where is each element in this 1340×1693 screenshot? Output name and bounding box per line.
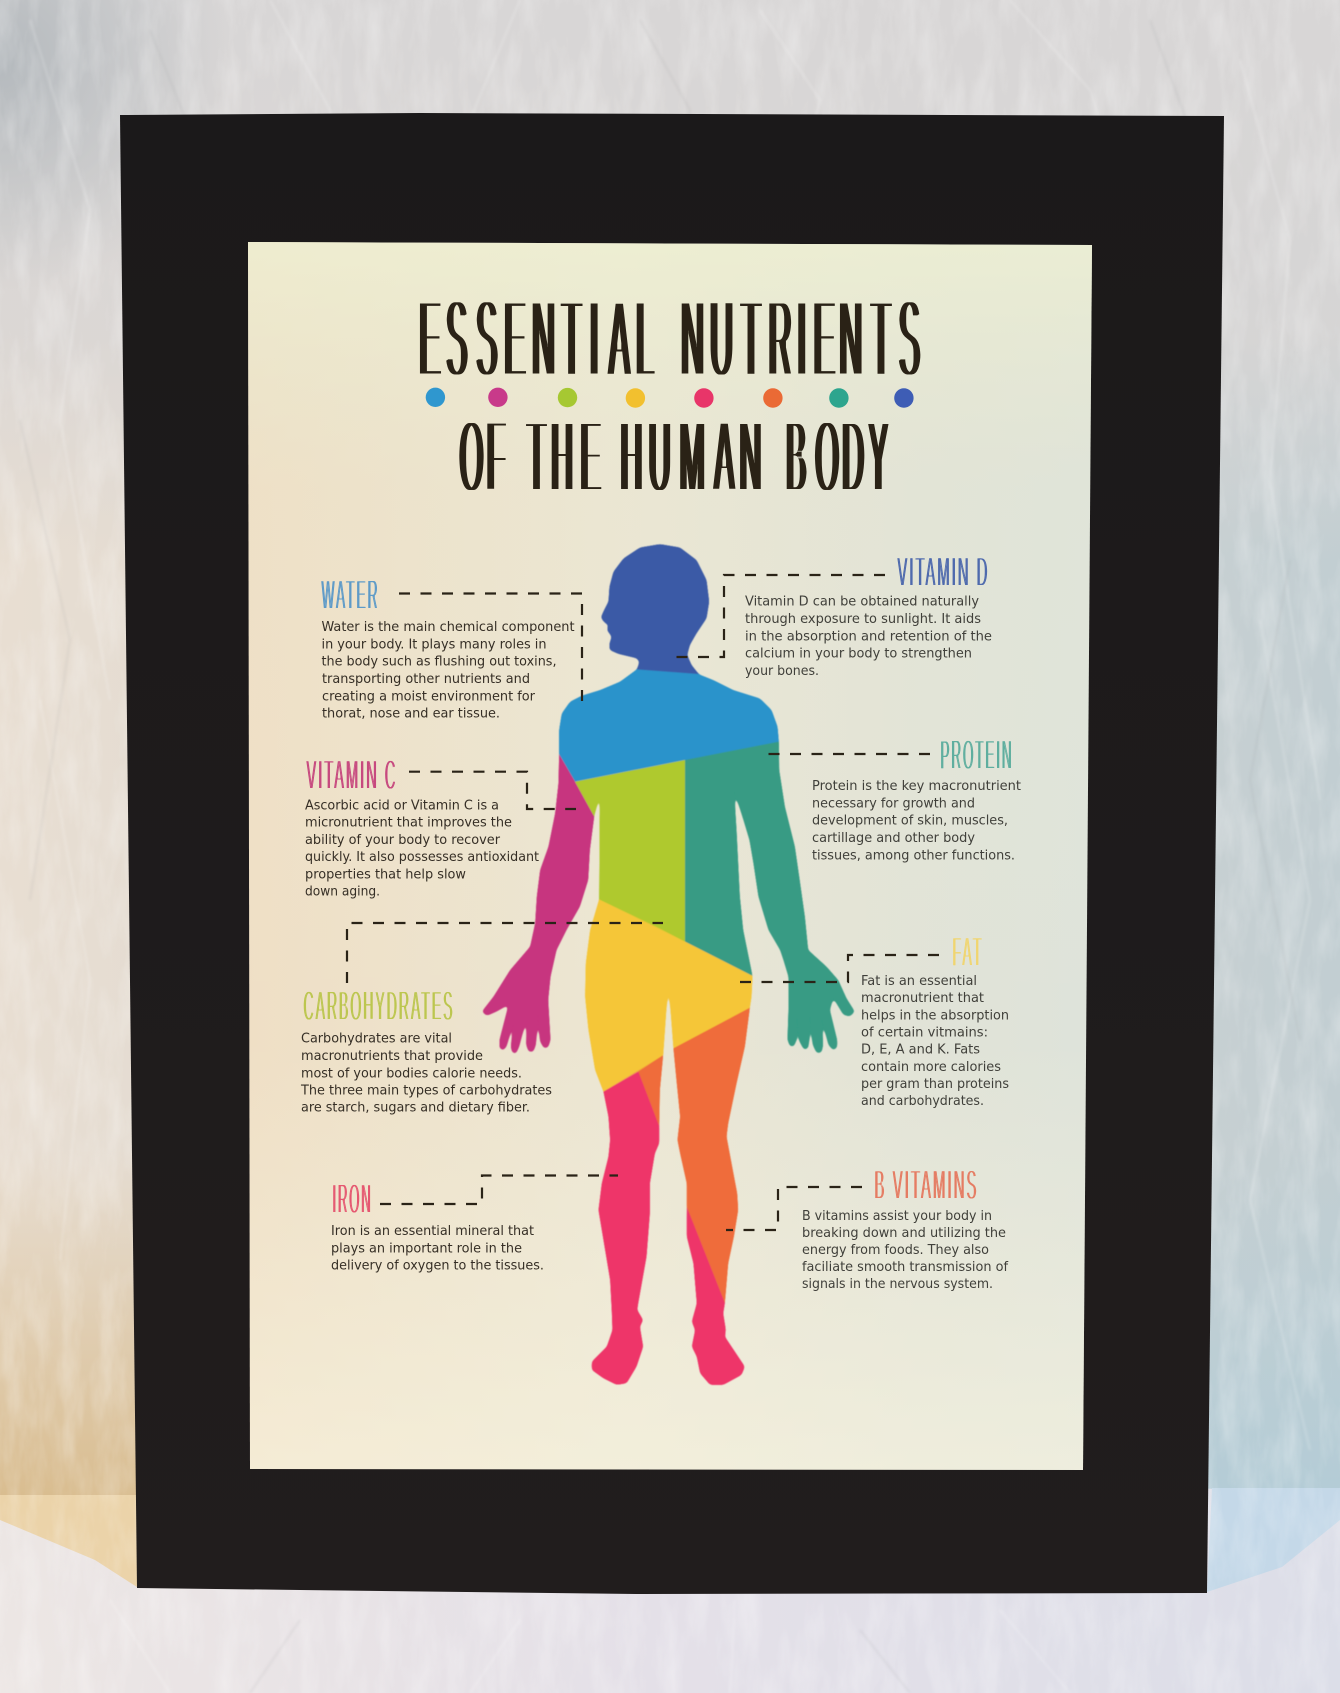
text: fat: helps in the absorption (861, 1008, 1009, 1023)
text: fat: Fat is an essential (861, 974, 977, 989)
text: water: the body such as flushing out toxins, (322, 655, 556, 670)
text: fat: per gram than proteins (861, 1077, 1009, 1092)
text: B vitamins: faciliate smooth transmission of (802, 1260, 1008, 1275)
panel: water (321, 571, 582, 722)
text: vitamin D: calcium in your body to strengthen (745, 647, 972, 662)
text: water: transporting other nutrients and (322, 672, 530, 687)
panel: vitamin C: VITAMIN C (306, 751, 397, 798)
text: vitamin D (745, 595, 992, 679)
body: shoulders, water (559, 669, 779, 782)
panel: water: WATER (321, 571, 379, 618)
body: right lower leg, iron (687, 1207, 745, 1385)
panel: vitamin C (305, 751, 576, 900)
text: water: Water is the main chemical component (322, 620, 574, 635)
body: torso left, carbohydrates colour green (575, 760, 685, 942)
text: vitamin D: through exposure to sunlight. It aids (745, 612, 981, 627)
connector: protein (767, 753, 930, 755)
text: B VITAMINS (874, 1161, 978, 1208)
text: vitamin D: Vitamin D can be obtained naturally (745, 595, 979, 610)
panel: protein (767, 731, 1021, 863)
text: carbohydrates: macronutrients that provide (301, 1049, 483, 1064)
text: fat: and carbohydrates. (861, 1094, 984, 1109)
panel: fat: FAT (952, 928, 983, 975)
panel: carbohydrates: CARBOHYDRATES (303, 982, 454, 1029)
row of coloured dots (426, 388, 914, 408)
text: protein: Protein is the key macronutrient (812, 779, 1021, 794)
text: carbohydrates: are starch, sugars and dietary fiber. (301, 1101, 530, 1116)
text: carbohydrates: The three main types of carbohydrates (300, 1084, 552, 1098)
body: hips, fat (585, 899, 753, 1092)
text: carbohydrates (300, 1032, 552, 1116)
human body figure (482, 544, 855, 1385)
panel: carbohydrates (300, 923, 663, 1116)
text: vitamin C (305, 798, 539, 900)
body: left leg, iron (592, 1072, 659, 1385)
panel: iron (331, 1175, 618, 1274)
text: fat: of certain vitmains: (861, 1026, 988, 1040)
text: vitamin C: micronutrient that improves the (305, 816, 512, 831)
text: fat (861, 974, 1009, 1109)
connector: carbohydrates (347, 923, 663, 983)
text: VITAMIN D (897, 548, 989, 595)
text: water: in your body. It plays many roles in (322, 637, 546, 652)
text: B vitamins: breaking down and utilizing the (802, 1226, 1006, 1241)
text: iron: delivery of oxygen to the tissues. (331, 1258, 544, 1274)
title line 2: OF THE HUMAN BODY (460, 400, 888, 515)
text: carbohydrates: Carbohydrates are vital (301, 1032, 452, 1047)
text: vitamin C: quickly. It also possesses antioxidant (305, 850, 539, 865)
text: vitamin C: ability of your body to recover (305, 833, 500, 848)
connector: vitamin C (409, 772, 576, 809)
panel: iron: IRON (332, 1175, 372, 1222)
connector: water (399, 594, 582, 704)
body: right leg, B vitamins (673, 1008, 750, 1303)
text: iron (331, 1224, 544, 1274)
text: vitamin D: in the absorption and retention of the (745, 629, 992, 644)
text: carbohydrates: most of your bodies calorie needs. (301, 1066, 522, 1081)
text: B vitamins: signals in the nervous system. (802, 1277, 993, 1292)
text: B vitamins: energy from foods. They also (802, 1243, 989, 1258)
panel: B vitamins (726, 1161, 1008, 1292)
text: B vitamins: B vitamins assist your body in (802, 1209, 992, 1224)
body: torso right and arm, protein (685, 742, 855, 1053)
text: PROTEIN (940, 731, 1013, 778)
title line 1: ESSENTIAL NUTRIENTS (419, 277, 920, 401)
text: protein: tissues, among other functions. (812, 848, 1015, 863)
text: iron: Iron is an essential mineral that (331, 1224, 534, 1239)
connector: iron (380, 1176, 618, 1204)
panel: fat (737, 928, 1009, 1109)
connector: B vitamins (726, 1187, 862, 1230)
text: vitamin D: your bones. (745, 664, 819, 679)
body: head, vitamin D (601, 544, 709, 675)
cream poster (248, 242, 1092, 1470)
connector: vitamin D (671, 575, 885, 657)
body: left arm, vitamin C (482, 754, 594, 1054)
title: essential nutrients of the human body (419, 277, 920, 515)
black backing board (120, 113, 1224, 1594)
connector: fat (737, 955, 939, 982)
text: protein: development of skin, muscles, (812, 814, 1008, 829)
text: vitamin C: down aging. (305, 884, 380, 900)
text: fat: contain more calories (861, 1060, 1001, 1075)
text: protein (812, 779, 1021, 863)
text: water: thorat, nose and ear tissue. (322, 707, 500, 722)
text: B vitamins (802, 1209, 1008, 1292)
text: water: creating a moist environment for (322, 689, 535, 704)
text: fat: macronutrient that (861, 991, 984, 1006)
text: vitamin C: Ascorbic acid or Vitamin C is a (305, 798, 499, 813)
text: protein: cartillage and other body (812, 831, 975, 846)
text: water (322, 620, 574, 722)
body: inner thigh, B vitamins (638, 1055, 663, 1127)
text: fat: D, E, A and K. Fats (861, 1043, 980, 1058)
text: iron: plays an important role in the (331, 1241, 522, 1256)
panel: vitamin D (671, 548, 992, 679)
text: protein: necessary for growth and (812, 796, 975, 811)
text: vitamin C: properties that help slow (305, 868, 466, 882)
